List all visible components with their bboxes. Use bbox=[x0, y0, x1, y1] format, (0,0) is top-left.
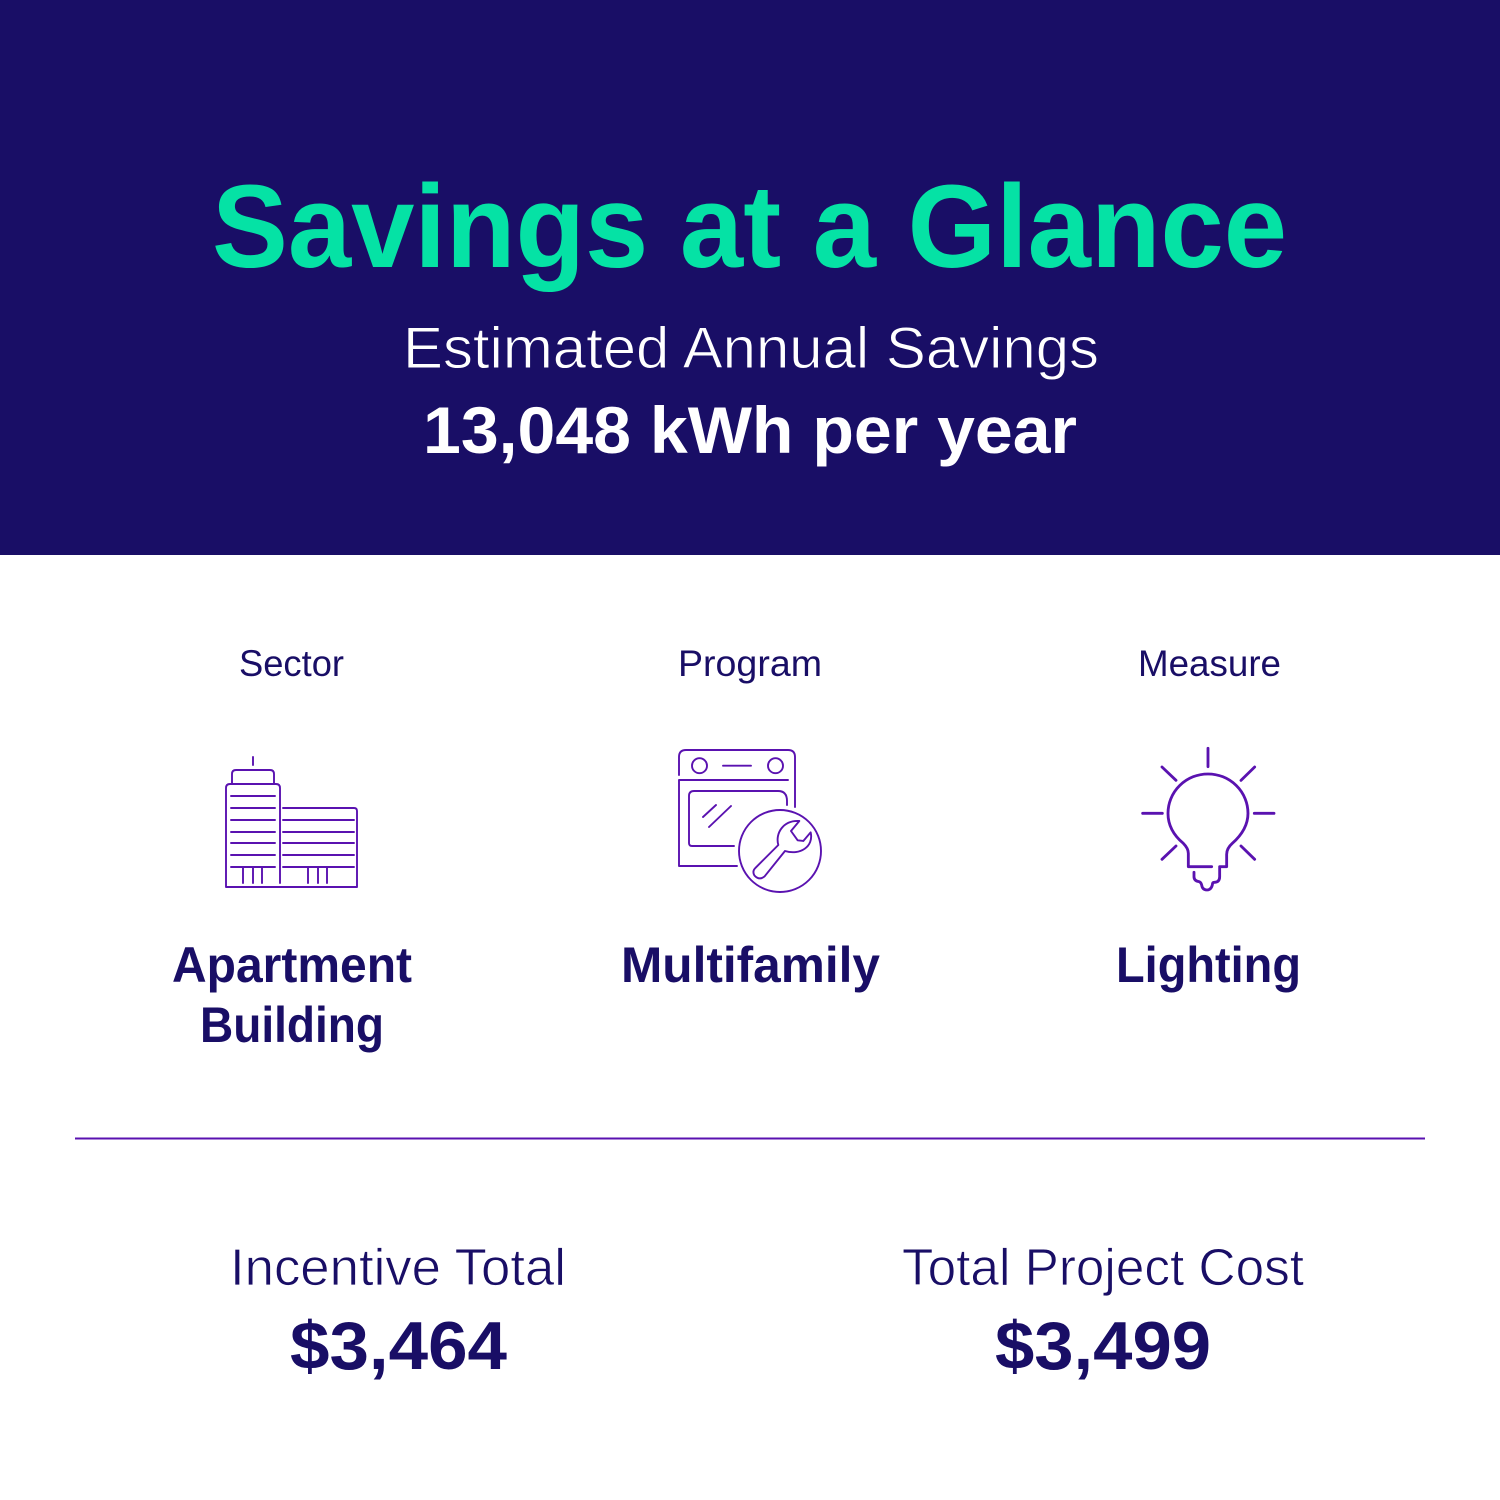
panel: total project cost bbox=[902, 1239, 1305, 1384]
panel: measure bbox=[1116, 643, 1301, 993]
panel: incentive total bbox=[230, 1239, 566, 1384]
icon: oven with wrench bbox=[679, 750, 821, 892]
program value: Multifamily bbox=[621, 937, 880, 993]
incentive amount: $3,464 bbox=[290, 1308, 507, 1384]
panel: program bbox=[621, 643, 880, 993]
project cost label: Total Project Cost bbox=[902, 1239, 1305, 1297]
sector label: Sector bbox=[239, 643, 344, 684]
project cost amount: $3,499 bbox=[995, 1308, 1211, 1384]
icon: light bulb bbox=[1143, 748, 1274, 890]
title: Savings at a Glance bbox=[212, 161, 1287, 293]
incentive label: Incentive Total bbox=[230, 1239, 566, 1297]
sector value: Apartment bbox=[172, 937, 412, 993]
sector value: Building bbox=[200, 997, 384, 1053]
measure value: Lighting bbox=[1116, 937, 1301, 993]
panel: sector bbox=[172, 643, 412, 1053]
program label: Program bbox=[678, 643, 822, 684]
subtitle: Estimated Annual Savings bbox=[403, 316, 1099, 381]
header banner bbox=[0, 0, 1500, 555]
annual savings figure: 13,048 kWh per year bbox=[423, 393, 1077, 467]
icon: apartment building bbox=[226, 757, 357, 887]
measure label: Measure bbox=[1138, 643, 1281, 684]
